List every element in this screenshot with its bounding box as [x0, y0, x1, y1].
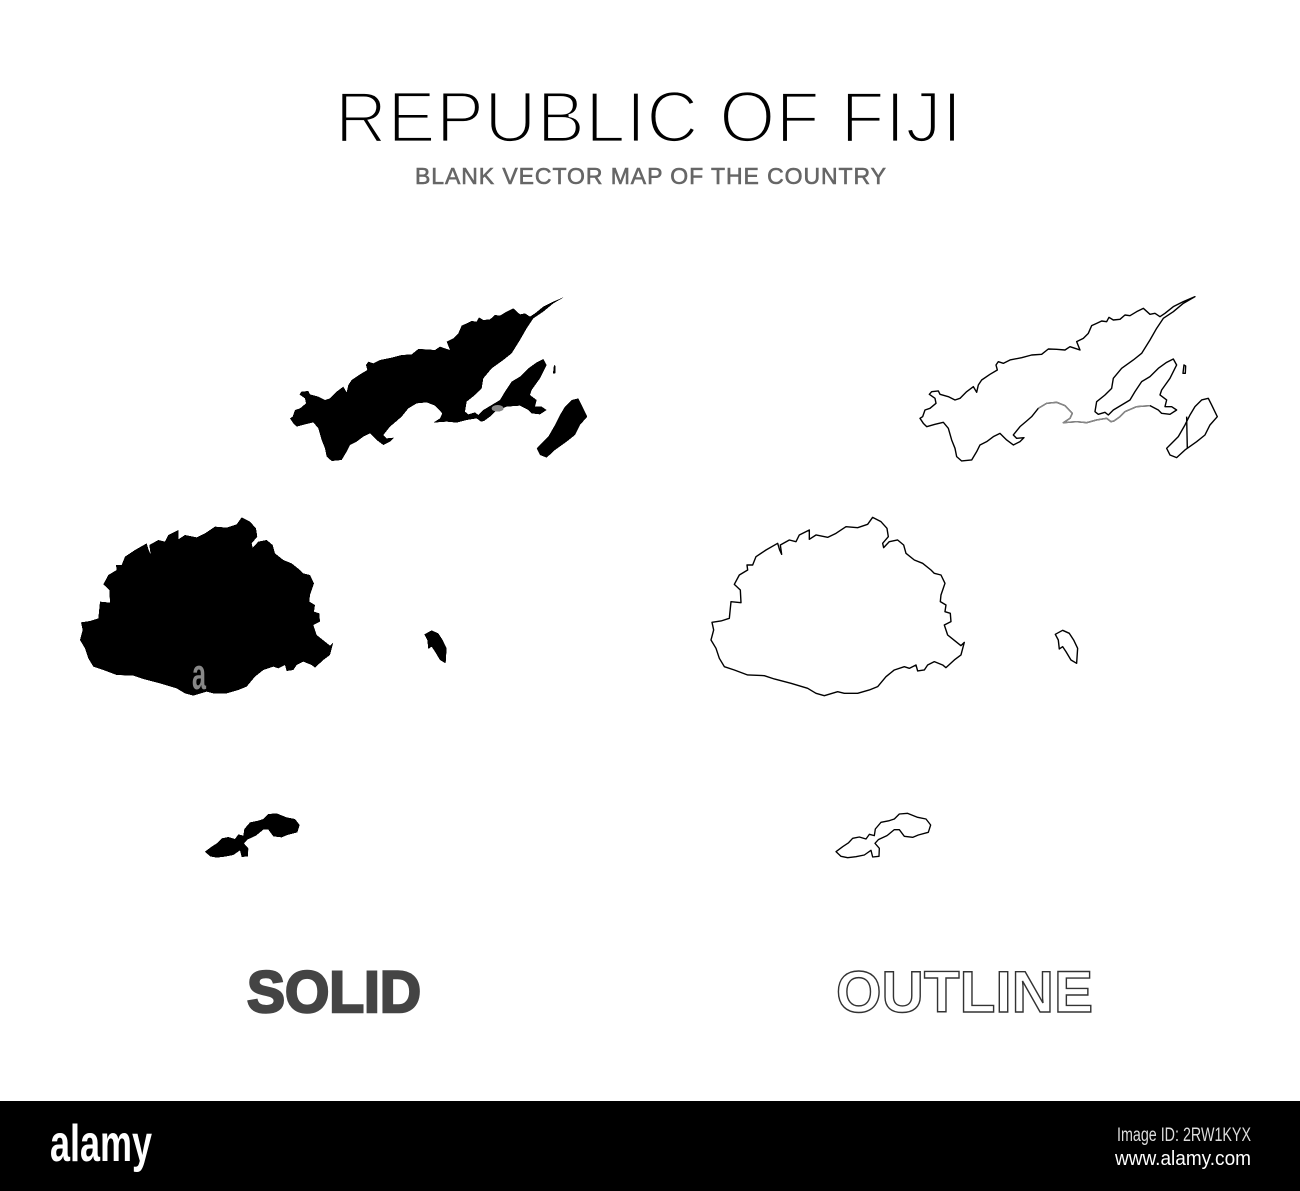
- image id: Image ID: 2RW1KYX: [1117, 1125, 1251, 1146]
- title: REPUBLIC OF FIJI: [335, 78, 962, 158]
- footer logo: alamy: [50, 1115, 152, 1173]
- solid label: SOLID: [247, 960, 421, 1025]
- main island solid: [80, 517, 447, 696]
- outline map: [711, 297, 1217, 858]
- southern island solid: [205, 813, 300, 858]
- solid map: [80, 297, 587, 858]
- northern islands solid: [290, 297, 587, 461]
- northern islands outline: [920, 297, 1217, 461]
- outline label: OUTLINE: [836, 960, 1093, 1025]
- website: www.alamy.com: [1114, 1148, 1251, 1170]
- subtitle: BLANK VECTOR MAP OF THE COUNTRY: [415, 163, 886, 189]
- main island outline: [711, 517, 1078, 696]
- southern island outline: [836, 813, 931, 858]
- footer bar: [0, 1101, 1300, 1191]
- watermark letter: a: [192, 650, 206, 699]
